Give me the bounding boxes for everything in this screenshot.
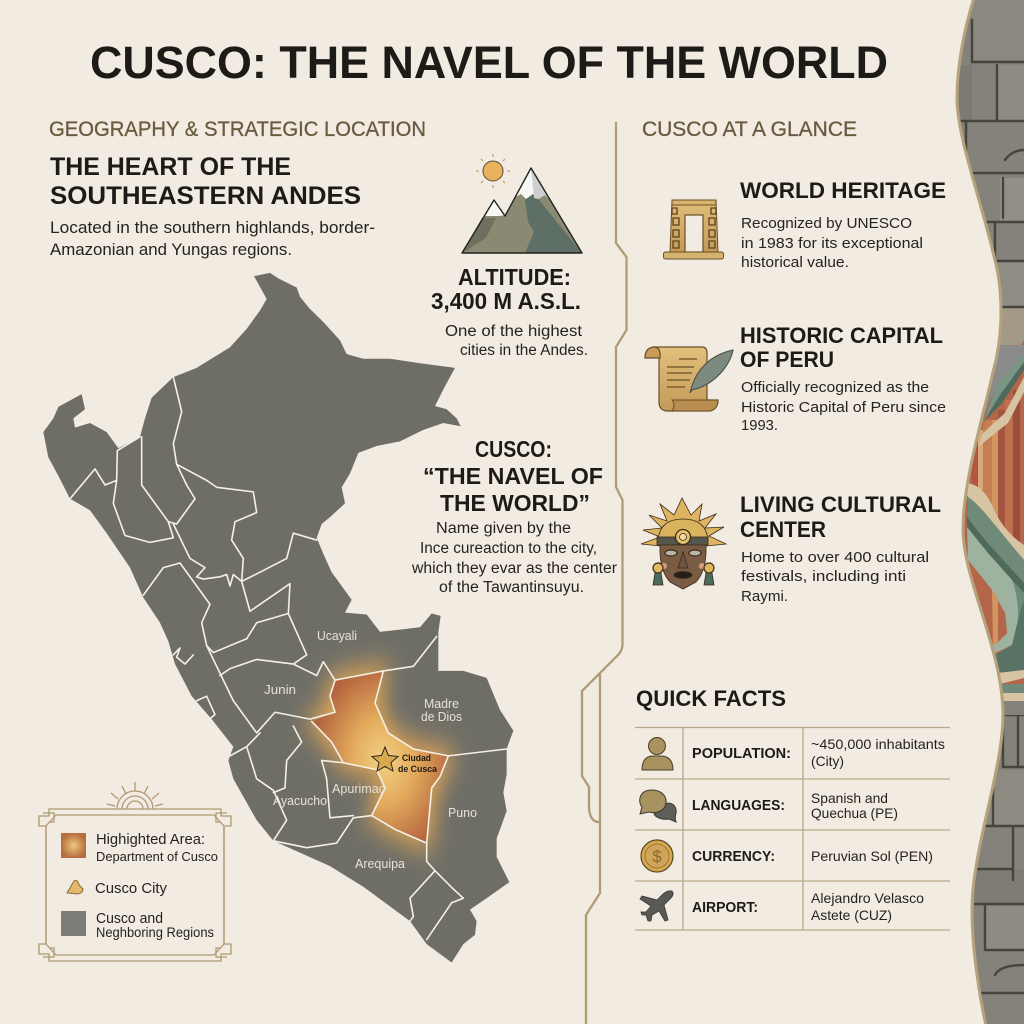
- text block: world heritage: in 1983 for its exceptional: [741, 235, 923, 252]
- highlighted Cusco department: [312, 671, 448, 843]
- row: currency: Peruvian Sol (PEN): [811, 848, 933, 864]
- text block: living cultural center: festivals, including inti: [741, 568, 906, 585]
- text block: altitude: 3,400 M A.S.L.: [431, 288, 581, 314]
- mural bands: [983, 353, 1024, 423]
- text block: historic capital: 1993.: [741, 417, 778, 434]
- text block: world heritage: historical value.: [741, 254, 849, 271]
- legend: [39, 782, 231, 961]
- text block: living cultural center: Raymi.: [741, 588, 788, 605]
- legend item: department: Highighted Area:: [96, 832, 205, 848]
- icon: chat bubbles: [640, 790, 676, 822]
- text block: altitude: cities in the Andes.: [460, 342, 588, 359]
- row: languages: Quechua (PE): [811, 805, 898, 821]
- section heading: geography: GEOGRAPHY & STRATEGIC LOCATION: [49, 118, 426, 141]
- map labels: Ucayali: [317, 628, 357, 643]
- text block: navel of the world: Name given by the: [436, 520, 571, 537]
- legend item: regions: Cusco and: [96, 911, 163, 927]
- legend frame: [39, 809, 231, 961]
- row: currency: [641, 840, 933, 872]
- icon: legend sun: [107, 782, 163, 809]
- legend item: regions: Neghboring Regions: [96, 925, 214, 940]
- text block: world heritage: WORLD HERITAGE: [740, 178, 946, 203]
- text block: navel of the world: THE WORLD”: [440, 490, 590, 516]
- map labels: Arequipa: [355, 856, 406, 871]
- heading: heart of the Andes: [50, 153, 361, 210]
- map labels: Apurimac: [332, 781, 385, 796]
- map labels: Junin: [264, 682, 296, 697]
- row: population: (City): [811, 753, 844, 769]
- text block: navel of the world: “THE NAVEL OF: [423, 463, 603, 489]
- row: population: ~450,000 inhabitants: [811, 736, 945, 752]
- icon: Cusco city star: [372, 747, 398, 771]
- row: population: POPULATION:: [692, 746, 791, 762]
- legend item: city: [67, 880, 168, 897]
- legend item: regions: [61, 911, 214, 940]
- title: CUSCO: THE NAVEL OF THE WORLD: [90, 37, 888, 88]
- text block: navel of the world: Ince cureaction to the city,: [420, 540, 597, 557]
- text block: location: Amazonian and Yungas regions.: [50, 240, 292, 259]
- section heading: at a glance: CUSCO AT A GLANCE: [642, 118, 857, 141]
- row: languages: [640, 790, 898, 822]
- table: quick facts: [635, 727, 950, 930]
- text block: location: [50, 218, 375, 259]
- row: airport: AIRPORT:: [692, 900, 758, 916]
- row: airport: Alejandro Velasco: [811, 890, 924, 906]
- map labels: de Dios: [421, 709, 462, 724]
- text block: navel of the world: which they evar as the center: [411, 560, 617, 577]
- row: currency: CURRENCY:: [692, 849, 775, 865]
- icon: inca gate: [664, 200, 724, 259]
- label: Cusco city: de Cusca: [398, 764, 438, 775]
- map labels: Ayacucho: [273, 793, 327, 808]
- icon: inca mask: [641, 498, 726, 589]
- text block: world heritage: Recognized by UNESCO: [741, 215, 912, 232]
- label: Cusco city: [398, 753, 438, 775]
- text block: location: Located in the southern highlands, border-: [50, 218, 375, 237]
- row: population: [642, 736, 945, 770]
- text block: historic capital: HISTORIC CAPITAL: [740, 323, 943, 348]
- strip edge: [957, 0, 1003, 1024]
- icon: airplane: [640, 891, 673, 921]
- text block: navel of the world: of the Tawantinsuyu.: [439, 579, 584, 596]
- row: airport: Astete (CUZ): [811, 907, 892, 923]
- legend item: city: Cusco City: [95, 881, 168, 897]
- legend item: department: [61, 832, 218, 864]
- text block: historic capital: [740, 323, 946, 434]
- text block: altitude: [431, 264, 588, 359]
- row: languages: LANGUAGES:: [692, 798, 785, 814]
- panel: right stone and mural border: [958, 0, 1024, 1024]
- legend item: department: Department of Cusco: [96, 849, 218, 864]
- text block: altitude: One of the highest: [445, 323, 583, 340]
- text block: historic capital: Officially recognized as the: [741, 379, 929, 396]
- heading: quick facts: QUICK FACTS: [636, 686, 786, 711]
- map labels: Madre: [424, 696, 459, 711]
- text block: living cultural center: Home to over 400 cultural: [741, 549, 929, 566]
- text block: living cultural center: LIVING CULTURAL: [740, 492, 941, 517]
- heading: heart of the Andes: THE HEART OF THE: [50, 153, 291, 181]
- column divider: [582, 122, 626, 1024]
- map labels: [264, 628, 477, 871]
- icon: coin: [641, 840, 673, 872]
- icon: person: [642, 738, 673, 770]
- text block: historic capital: Historic Capital of Peru since: [741, 399, 946, 416]
- text block: living cultural center: [740, 492, 941, 605]
- map of Peru: [43, 273, 513, 962]
- icon: coin: $: [652, 847, 662, 866]
- text block: navel of the world: [411, 436, 617, 596]
- text block: altitude: ALTITUDE:: [458, 264, 571, 290]
- text block: historic capital: OF PERU: [740, 347, 834, 372]
- row: airport: [640, 890, 924, 923]
- text block: living cultural center: CENTER: [740, 517, 826, 542]
- text block: navel of the world: CUSCO:: [475, 436, 552, 462]
- map labels: Puno: [448, 805, 477, 820]
- mural: [960, 340, 1024, 715]
- icon: scroll and quill: [645, 347, 733, 411]
- label: Cusco city: Cludad: [402, 753, 431, 764]
- icon: mountains and sun: [462, 154, 582, 253]
- row: languages: Spanish and: [811, 790, 888, 806]
- heading: heart of the Andes: SOUTHEASTERN ANDES: [50, 182, 361, 210]
- text block: world heritage: [740, 178, 946, 271]
